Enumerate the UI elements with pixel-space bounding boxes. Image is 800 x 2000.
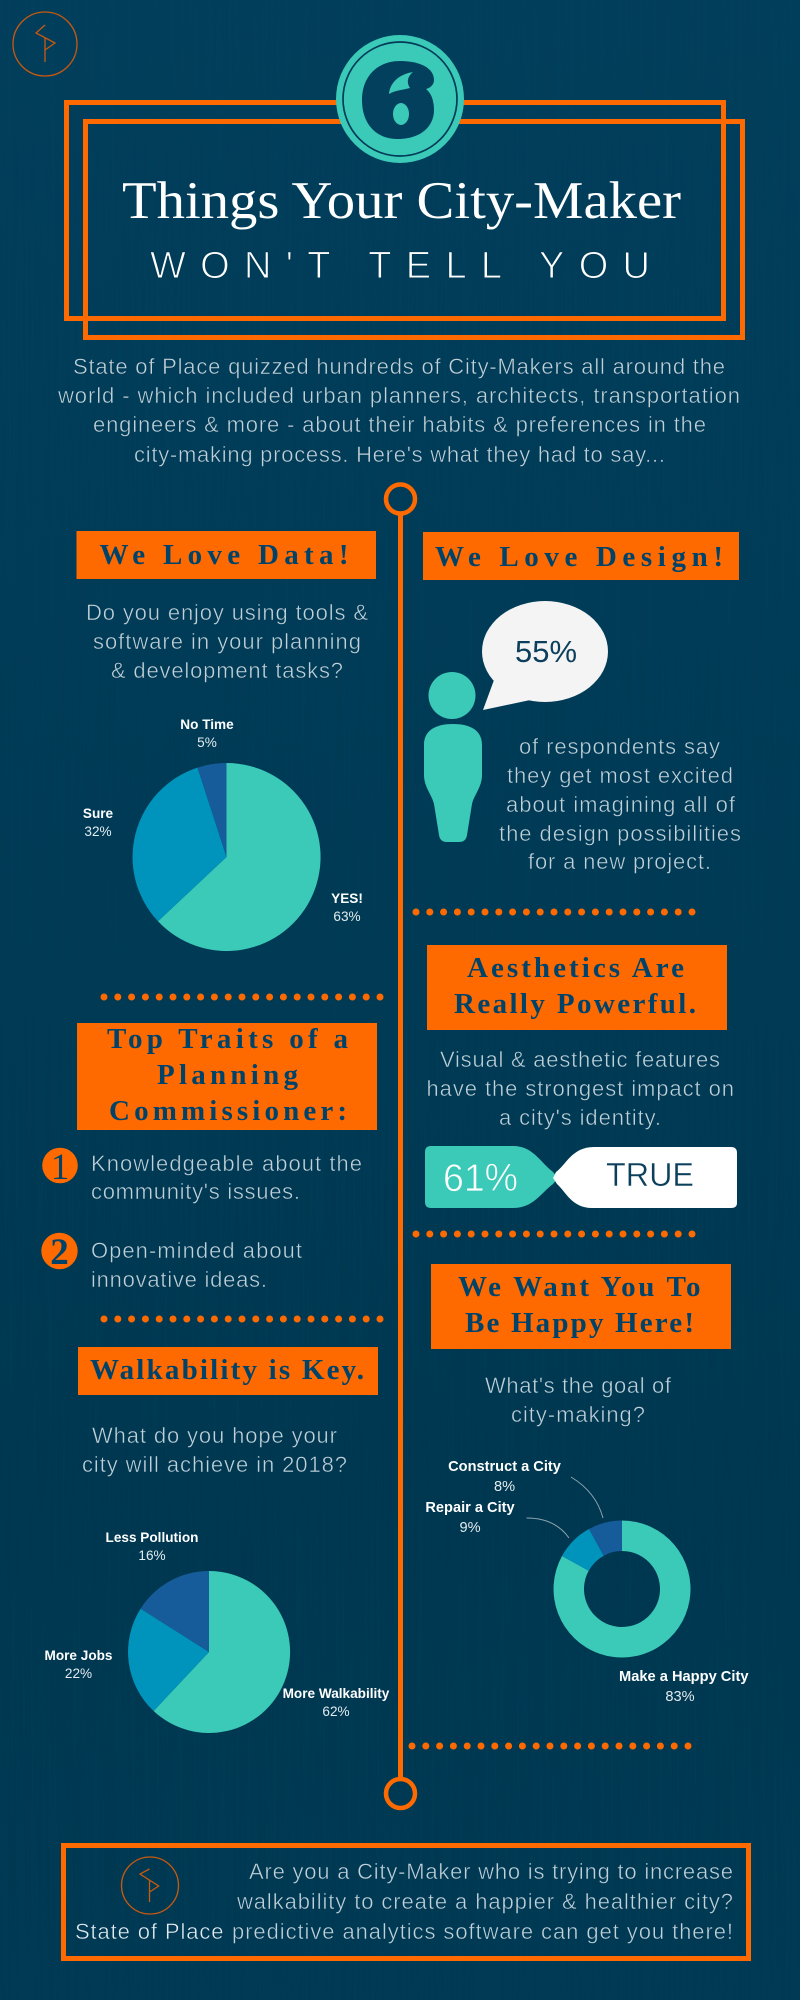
respondents text: [499, 734, 741, 874]
heading: We Want You To: [458, 1271, 700, 1303]
donut chart: goal of city-making: 8%: [494, 1479, 515, 1495]
number six badge: 6: [367, 44, 429, 160]
footer text: Are you a City-Maker who is trying to increase: [249, 1859, 733, 1884]
icon: top logo: [13, 12, 77, 76]
panel: top traits: [41, 1023, 377, 1292]
donut chart: goal of city-making: 9%: [459, 1520, 481, 1536]
aesthetics text: a city's identity.: [499, 1105, 661, 1130]
heading: Really Powerful.: [454, 988, 696, 1020]
title block: [66, 35, 742, 338]
trait one: Knowledgeable about the: [91, 1151, 362, 1176]
pie chart: 2018 goals: More Walkability: [283, 1686, 390, 1701]
trait two: 2: [50, 1232, 69, 1273]
pie chart: tools: 63%: [333, 909, 361, 924]
pie chart: 2018 goals: More Jobs: [45, 1648, 112, 1663]
footer text: predictive analytics software can get you there!: [232, 1919, 733, 1944]
speech bubble with 55%: 55%: [515, 634, 577, 669]
question text: [86, 600, 368, 683]
pie chart: 2018 goals: Less Pollution: [106, 1530, 198, 1545]
pie chart: 2018 goals: 16%: [138, 1548, 166, 1563]
title line two: WON'T TELL YOU: [150, 245, 650, 287]
title line one: Things Your City-Maker: [122, 172, 681, 230]
trait one: [42, 1147, 362, 1204]
pie chart: tools: Sure: [83, 806, 114, 821]
heading: Walkability is Key.: [90, 1354, 364, 1386]
trait two: Open-minded about: [91, 1238, 302, 1263]
pie chart: 2018 goals: 62%: [322, 1704, 350, 1719]
heading: [78, 1347, 378, 1395]
intro text: State of Place quizzed hundreds of City-Makers all around the: [73, 354, 725, 379]
heading: We Love Design!: [435, 541, 723, 573]
donut chart: goal of city-making: 83%: [665, 1689, 695, 1705]
donut chart: goal of city-making: [425, 1459, 749, 1705]
heading: Planning: [157, 1059, 298, 1091]
pie chart: tools: YES!: [331, 891, 363, 906]
donut chart: goal of city-making: Construct a City: [448, 1459, 562, 1475]
donut chart: goal of city-making: Repair a City: [425, 1500, 515, 1516]
true toggle graphic: [425, 1146, 737, 1208]
pie chart: 2018 goals: [45, 1530, 390, 1733]
trait one: 1: [51, 1147, 69, 1188]
pie chart: tools: 5%: [197, 735, 217, 750]
footer text: walkability to create a happier & healthier city?: [236, 1889, 733, 1914]
timeline spine: [386, 484, 415, 1808]
heading: [76, 531, 376, 579]
aesthetics text: [426, 1047, 734, 1130]
footer frame: [64, 1846, 748, 1958]
icon: footer logo: [122, 1857, 178, 1914]
footer text: State of Place: [75, 1919, 224, 1944]
heading: We Love Data!: [100, 539, 348, 571]
panel: walkability: [45, 1347, 390, 1733]
intro text: [57, 354, 740, 467]
trait two: innovative ideas.: [91, 1267, 267, 1292]
title frames: [66, 102, 742, 338]
heading: Top Traits of a: [107, 1023, 348, 1055]
panel: we love data: [76, 531, 376, 951]
question text: software in your planning: [93, 629, 361, 654]
question text: What's the goal of: [485, 1373, 672, 1398]
question text: city-making?: [511, 1402, 645, 1427]
question text: & development tasks?: [111, 658, 343, 683]
heading: [423, 532, 739, 580]
respondents text: the design possibilities: [499, 821, 741, 846]
intro text: engineers & more - about their habits & preferences in the: [93, 412, 706, 437]
intro text: city-making process. Here's what they had to say...: [134, 442, 665, 467]
respondents text: about imagining all of: [506, 792, 736, 817]
number six badge: [336, 35, 464, 163]
respondents text: they get most excited: [507, 763, 733, 788]
icon: person: [424, 672, 482, 842]
true toggle graphic: 61%: [443, 1157, 518, 1200]
footer text: [75, 1859, 733, 1944]
speech bubble with 55%: [482, 601, 608, 710]
respondents text: for a new project.: [528, 849, 711, 874]
heading: Be Happy Here!: [465, 1307, 694, 1339]
question text: [82, 1423, 347, 1477]
question text: [485, 1373, 672, 1427]
question text: What do you hope your: [92, 1423, 337, 1448]
pie chart: tools: [83, 717, 363, 951]
panel: happy city: [425, 1264, 749, 1705]
heading: Aesthetics Are: [467, 952, 684, 984]
intro text: world - which included urban planners, architects, transportation: [57, 383, 740, 408]
trait one: community's issues.: [91, 1179, 300, 1204]
panel: we love design: [423, 532, 741, 874]
pie chart: tools: No Time: [180, 717, 234, 732]
pie chart: 2018 goals: 22%: [65, 1666, 92, 1681]
aesthetics text: Visual & aesthetic features: [440, 1047, 720, 1072]
aesthetics text: have the strongest impact on: [426, 1076, 734, 1101]
trait two: [41, 1232, 302, 1292]
heading: [77, 1023, 377, 1130]
panel: aesthetics: [425, 945, 737, 1208]
heading: [427, 945, 727, 1030]
question text: city will achieve in 2018?: [82, 1452, 347, 1477]
dotted dividers: [104, 912, 693, 1746]
true toggle graphic: TRUE: [606, 1156, 694, 1193]
question text: Do you enjoy using tools &: [86, 600, 368, 625]
respondents text: of respondents say: [519, 734, 720, 759]
panel: call to action: [64, 1846, 748, 1958]
donut chart: goal of city-making: Make a Happy City: [619, 1669, 749, 1685]
pie chart: tools: 32%: [84, 824, 112, 839]
heading: [431, 1264, 731, 1349]
heading: Commissioner:: [109, 1095, 347, 1127]
